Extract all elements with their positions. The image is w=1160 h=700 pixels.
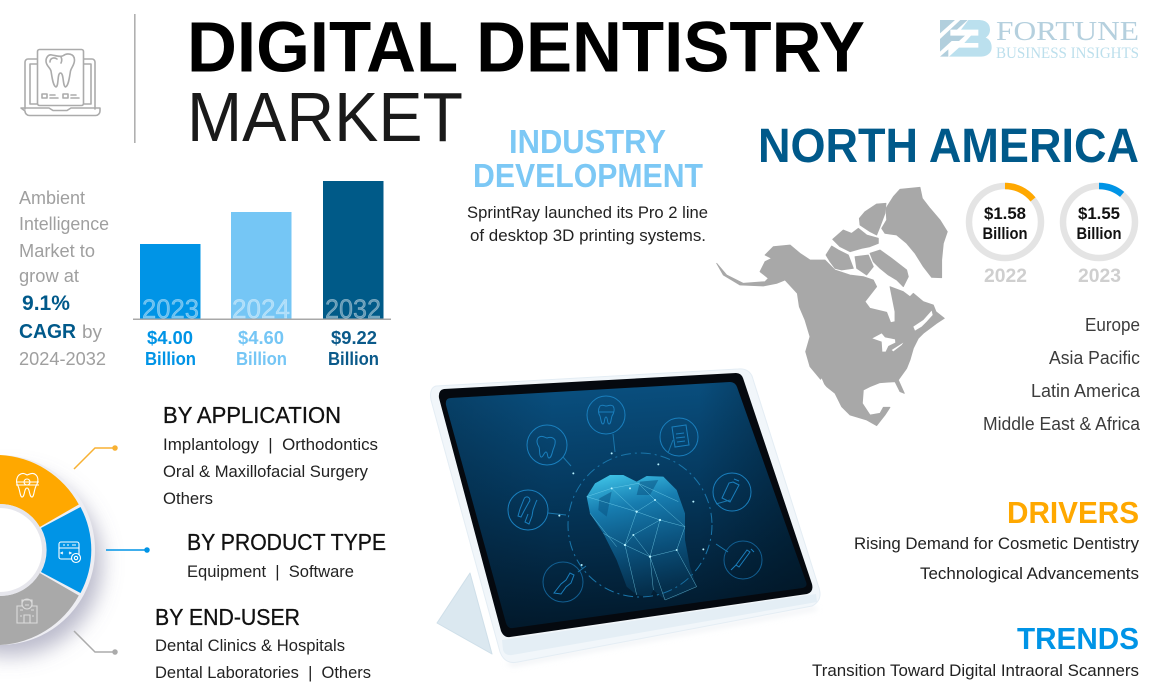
industry development text: SprintRay launched its Pro 2 line	[467, 203, 708, 222]
map: North America	[717, 187, 947, 426]
heading: North America: NORTH AMERICA	[758, 120, 1139, 173]
heading: trends: TRENDS	[1017, 621, 1139, 656]
bar chart: market size: 2032	[325, 294, 381, 324]
section: by product type: Equipment | Software	[187, 562, 354, 581]
section: by end-user: BY END-USER	[155, 604, 300, 630]
title: MARKET	[187, 78, 463, 156]
bar chart: market size: 2023	[142, 294, 199, 324]
tablet shadow	[505, 606, 818, 667]
connector: end-user	[74, 631, 117, 654]
section: by application	[163, 402, 378, 508]
industry development heading: DEVELOPMENT	[473, 157, 703, 194]
central tooth	[558, 452, 704, 600]
tablet bezel	[439, 373, 812, 637]
section: by application: Implantology | Orthodontics	[163, 435, 378, 454]
connector: application	[74, 446, 117, 469]
list: other regions: Middle East & Africa	[983, 414, 1141, 434]
industry development text	[467, 203, 708, 245]
donut: 2023 value: 2023	[1078, 266, 1121, 287]
bar chart: market size: Billion	[236, 349, 287, 369]
section: by application: BY APPLICATION	[163, 402, 341, 428]
title: DIGITAL DENTISTRY	[187, 8, 865, 88]
donut: 2023 value: Billion	[1076, 224, 1122, 243]
bar chart: market size: $4.00	[147, 328, 193, 348]
text: CAGR statement: 9.1%	[22, 292, 70, 315]
industry development text: of desktop 3D printing systems.	[470, 226, 706, 245]
donut: segment wheel	[0, 455, 102, 656]
text: trends list: Transition Toward Digital Intraoral Scanners	[812, 661, 1139, 680]
tablet screen	[446, 382, 806, 628]
divider line	[134, 14, 136, 143]
list: other regions	[983, 315, 1141, 434]
icon circles on screen	[508, 396, 762, 602]
text: CAGR statement: Intelligence	[19, 214, 109, 234]
section: by application: Oral & Maxillofacial Surgery	[163, 462, 368, 481]
section: by application: Others	[163, 489, 213, 508]
icon: laptop with tooth	[21, 50, 100, 116]
section: by product type: BY PRODUCT TYPE	[187, 529, 386, 555]
industry development heading	[473, 123, 703, 194]
list: other regions: Latin America	[1031, 381, 1141, 401]
image: tablet with tooth illustration	[431, 369, 820, 667]
text: CAGR statement: CAGR	[19, 321, 77, 343]
tablet case	[431, 369, 820, 663]
title	[187, 8, 865, 156]
donut: 2023 value: $1.55	[1078, 204, 1120, 223]
connector ticks	[548, 434, 730, 572]
dashed orbit	[568, 453, 712, 597]
tablet stand	[437, 573, 492, 654]
industry development heading: INDUSTRY	[509, 123, 666, 160]
logo: Fortune Business Insights: BUSINESS INSIGHTS	[996, 45, 1139, 62]
bar chart: market size: $4.60	[238, 328, 284, 348]
heading: drivers: DRIVERS	[1007, 495, 1139, 530]
text: drivers list: Rising Demand for Cosmetic Dentistry	[854, 534, 1139, 553]
donut: 2023 value	[1063, 186, 1135, 287]
text: CAGR statement: grow at	[19, 266, 79, 286]
text: drivers list	[854, 534, 1139, 583]
donut: 2022 value: $1.58	[984, 204, 1026, 223]
donut: 2022 value: 2022	[984, 266, 1027, 287]
text: CAGR statement: by	[82, 322, 102, 342]
list: other regions: Asia Pacific	[1049, 348, 1140, 368]
icon: tooth with braces	[16, 473, 39, 497]
section: by end-user	[155, 604, 371, 682]
section: by product type	[187, 529, 386, 581]
section: by end-user: Dental Laboratories | Others	[155, 663, 371, 682]
bar chart: market size: Billion	[145, 349, 196, 369]
logo: Fortune Business Insights: FORTUNE	[996, 16, 1139, 46]
text: CAGR statement	[19, 188, 109, 369]
text: CAGR statement: Ambient	[19, 188, 85, 208]
donut: 2022 value	[969, 186, 1041, 287]
bar chart: market size	[133, 181, 391, 369]
text: drivers list: Technological Advancements	[920, 564, 1139, 583]
bar chart: market size: Billion	[328, 349, 379, 369]
icon: hospital	[17, 599, 37, 623]
text: CAGR statement: 2024-2032	[19, 349, 106, 369]
donut: 2022 value: Billion	[982, 224, 1028, 243]
bar chart: market size: 2024	[232, 294, 290, 324]
logo: Fortune Business Insights	[940, 16, 1139, 62]
section: by end-user: Dental Clinics & Hospitals	[155, 636, 345, 655]
text: CAGR statement: Market to	[19, 241, 95, 261]
bar chart: market size: $9.22	[331, 328, 377, 348]
icon: code window with gear	[59, 542, 80, 562]
list: other regions: Europe	[1085, 315, 1140, 335]
connector: product type	[106, 548, 149, 552]
